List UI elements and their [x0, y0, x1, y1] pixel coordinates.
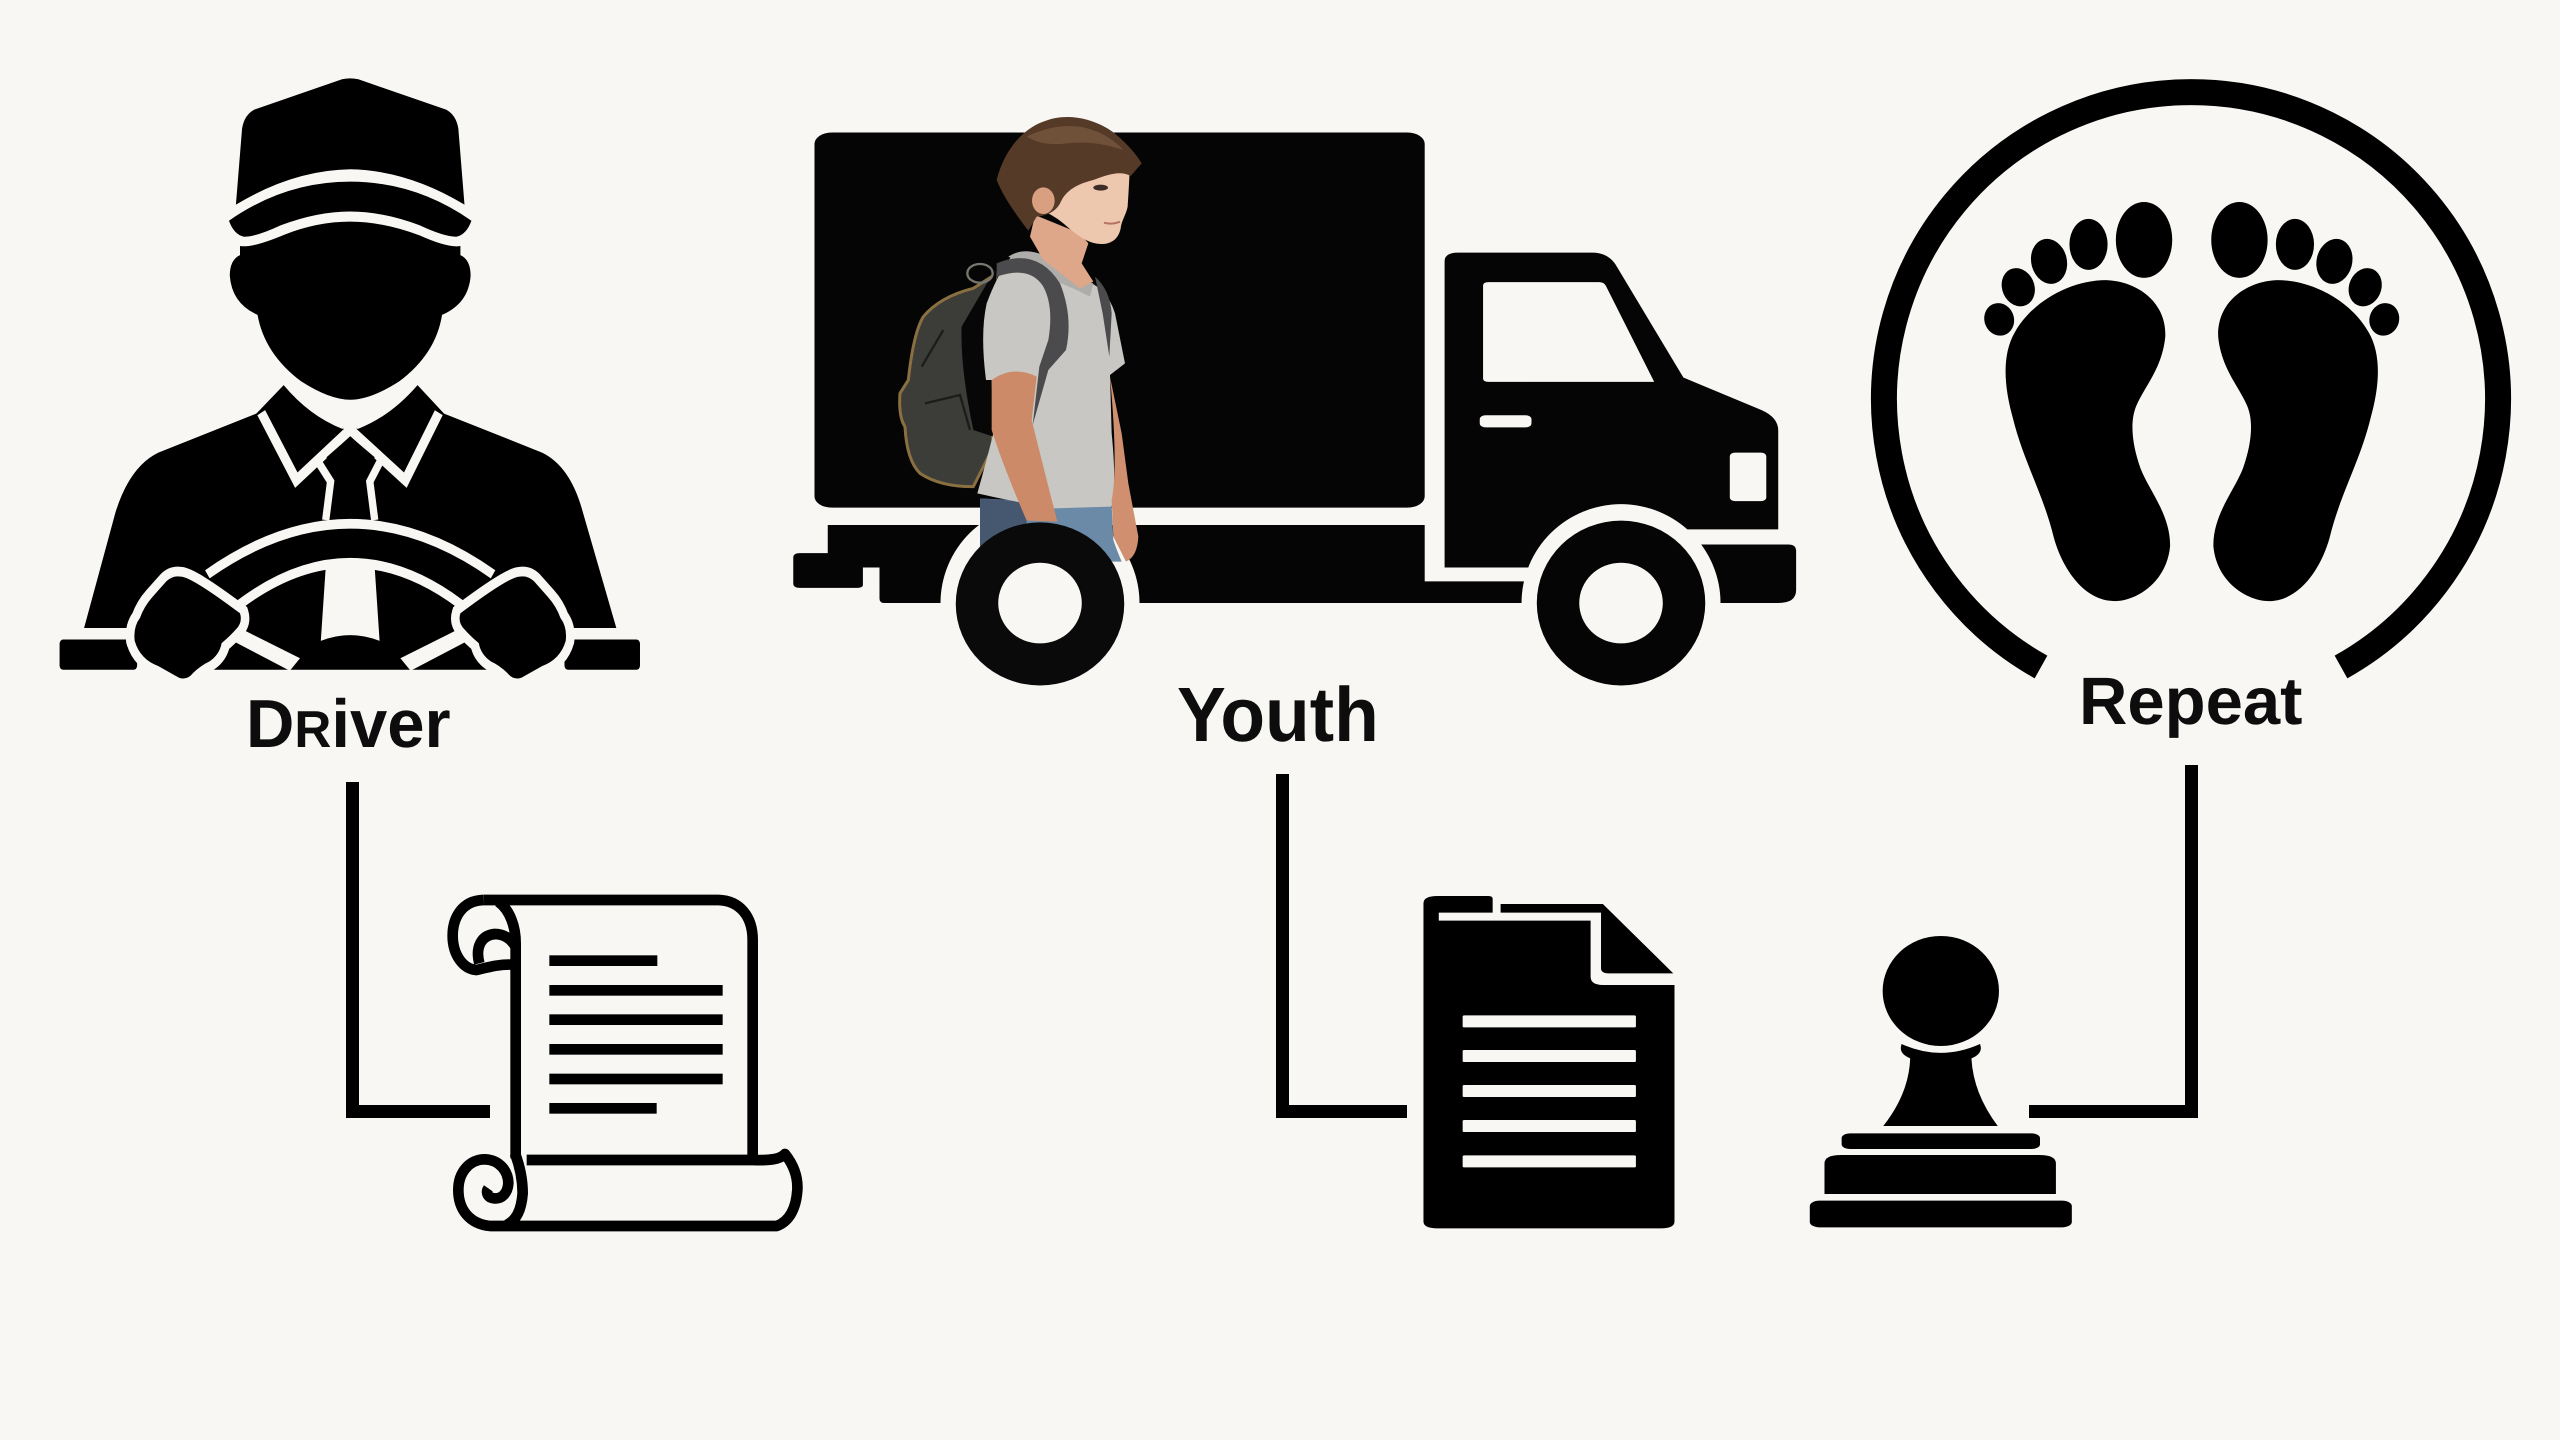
ear — [1032, 187, 1055, 214]
jeans — [980, 498, 1122, 562]
document text lines — [1463, 1015, 1636, 1167]
icon: paper scroll — [453, 900, 797, 1226]
truck body — [793, 133, 1796, 708]
rear wheel tyre — [956, 522, 1124, 685]
hair highlight — [1027, 126, 1123, 150]
front wheel arch — [1522, 504, 1721, 702]
headlight — [1730, 453, 1766, 501]
front wheel hub — [1579, 563, 1663, 643]
far arm — [1110, 377, 1138, 562]
dashboard bar right — [564, 639, 640, 670]
neck — [1030, 215, 1093, 288]
truck cab — [1445, 253, 1778, 567]
backpack far strap — [1095, 277, 1112, 357]
face — [1043, 163, 1130, 244]
right hand — [460, 576, 566, 679]
truck wheels — [956, 521, 1705, 685]
backpack pocket seam — [922, 330, 970, 430]
pawn neck — [1883, 1044, 1998, 1126]
backpack handle loop — [967, 264, 993, 283]
rear wheel hub — [998, 563, 1082, 643]
icon: delivery truck with boy — [793, 117, 1796, 708]
label: Youth: Youth — [1177, 672, 1379, 758]
connector: Repeat to pawn — [2029, 765, 2192, 1112]
right foot — [2211, 202, 2404, 601]
pawn base middle tier — [1824, 1155, 2056, 1194]
boy with backpack — [900, 117, 1142, 562]
steering wheel left spoke — [232, 630, 300, 671]
t-shirt — [977, 253, 1125, 508]
steering wheel rim outlines — [207, 524, 493, 604]
front wheel tyre — [1537, 521, 1705, 685]
label: Repeat: Repeat — [2079, 664, 2302, 739]
label: Driver: Driver — [246, 680, 451, 763]
document folded corner — [1501, 904, 1673, 973]
right toes — [2211, 202, 2404, 341]
chassis — [793, 525, 1529, 603]
right sole — [2213, 280, 2378, 601]
left hand — [134, 576, 241, 679]
open circle ring — [1884, 92, 2498, 667]
icon: chess pawn — [1810, 936, 2072, 1227]
necktie — [327, 437, 375, 521]
driver torso — [84, 385, 616, 670]
icon: footprints inside open circle — [1884, 92, 2498, 667]
scroll text lines — [549, 955, 723, 1114]
pawn base top tier — [1842, 1133, 2040, 1149]
shirt collar outline — [261, 413, 439, 480]
driver head — [230, 222, 471, 400]
mouth — [1104, 222, 1120, 224]
connector: Driver to scroll — [352, 782, 490, 1112]
backpack shadow panel — [961, 267, 997, 437]
cab window — [1483, 282, 1654, 382]
hair — [997, 117, 1142, 231]
left foot — [1979, 202, 2172, 601]
jeans shaded side — [980, 498, 1027, 562]
icon: driver at steering wheel — [60, 78, 640, 679]
steering wheel right spoke — [400, 630, 469, 671]
steering wheel centre spoke — [321, 567, 380, 641]
scroll outline — [453, 900, 797, 1226]
rear wheel arch — [941, 504, 1139, 702]
connector: Youth to document — [1282, 774, 1407, 1112]
document body — [1423, 896, 1674, 1228]
left sole — [2006, 280, 2170, 601]
cargo box — [814, 133, 1425, 508]
backpack front strap — [997, 258, 1069, 425]
pair of feet — [1979, 202, 2404, 601]
door handle — [1480, 415, 1531, 427]
near arm — [992, 372, 1057, 522]
left toes — [1979, 202, 2172, 341]
eye — [1093, 185, 1108, 191]
icon: document page — [1423, 896, 1674, 1228]
front bumper — [1695, 545, 1796, 603]
backpack — [900, 273, 997, 487]
pawn head — [1883, 936, 1999, 1046]
lower edge cover for arches — [933, 603, 1728, 708]
dashboard bar left — [60, 639, 137, 670]
pawn base bottom tier — [1810, 1201, 2072, 1227]
shirt collar — [1008, 251, 1093, 297]
driver cap crown — [236, 78, 464, 205]
necktie outline — [320, 459, 381, 520]
driver cap visor — [229, 182, 471, 237]
